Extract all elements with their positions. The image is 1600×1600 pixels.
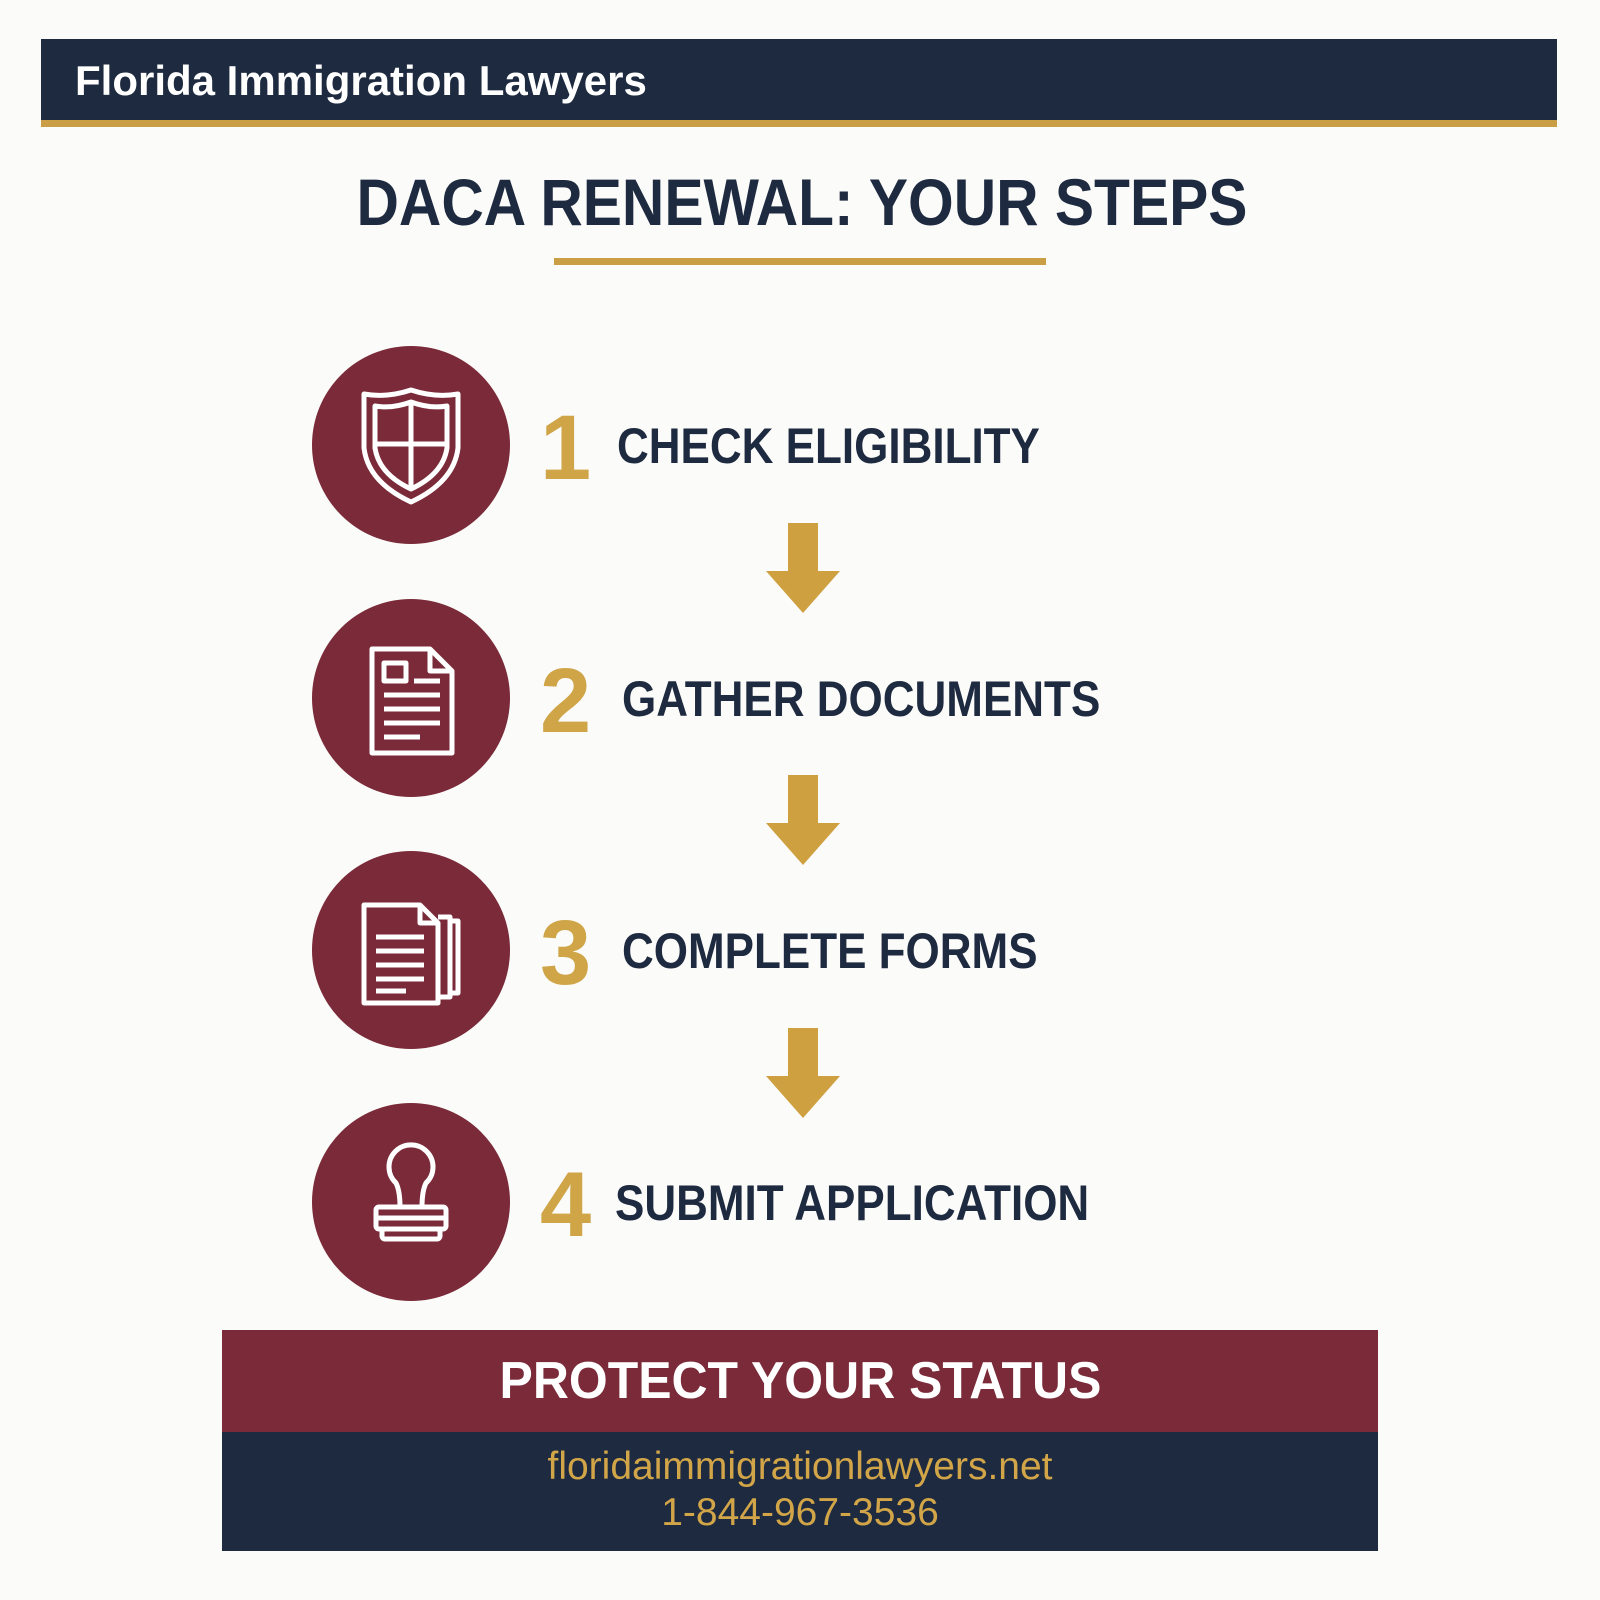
step 4 xyxy=(312,1103,1089,1301)
step 2 xyxy=(312,599,1100,797)
number 4: 4 xyxy=(540,1154,591,1256)
label: COMPLETE FORMS xyxy=(622,923,1038,979)
arrow 3 xyxy=(766,1028,840,1118)
icon: stamp xyxy=(312,1103,510,1301)
header bar xyxy=(41,39,1557,127)
icon: document xyxy=(312,599,510,797)
icon: forms xyxy=(312,851,510,1049)
contact info xyxy=(222,1432,1378,1551)
arrow 2 xyxy=(766,775,840,865)
footer heading: PROTECT YOUR STATUS xyxy=(499,1352,1101,1410)
header text: Florida Immigration Lawyers xyxy=(75,57,647,104)
number 1: 1 xyxy=(540,397,591,499)
number 2: 2 xyxy=(540,650,591,752)
footer heading xyxy=(222,1330,1378,1432)
label: SUBMIT APPLICATION xyxy=(615,1175,1089,1231)
title: DACA RENEWAL: YOUR STEPS xyxy=(357,165,1247,239)
step 3 xyxy=(312,851,1038,1049)
label: GATHER DOCUMENTS xyxy=(622,671,1100,727)
number 3: 3 xyxy=(540,902,591,1004)
contact info: floridaimmigrationlawyers.net xyxy=(547,1445,1053,1488)
icon: shield xyxy=(312,346,510,544)
label: CHECK ELIGIBILITY xyxy=(617,418,1040,474)
contact info: 1-844-967-3536 xyxy=(661,1491,939,1534)
step 1 xyxy=(312,346,1040,544)
footer panel xyxy=(222,1330,1378,1551)
arrow 1 xyxy=(766,523,840,613)
title underline xyxy=(554,258,1046,265)
